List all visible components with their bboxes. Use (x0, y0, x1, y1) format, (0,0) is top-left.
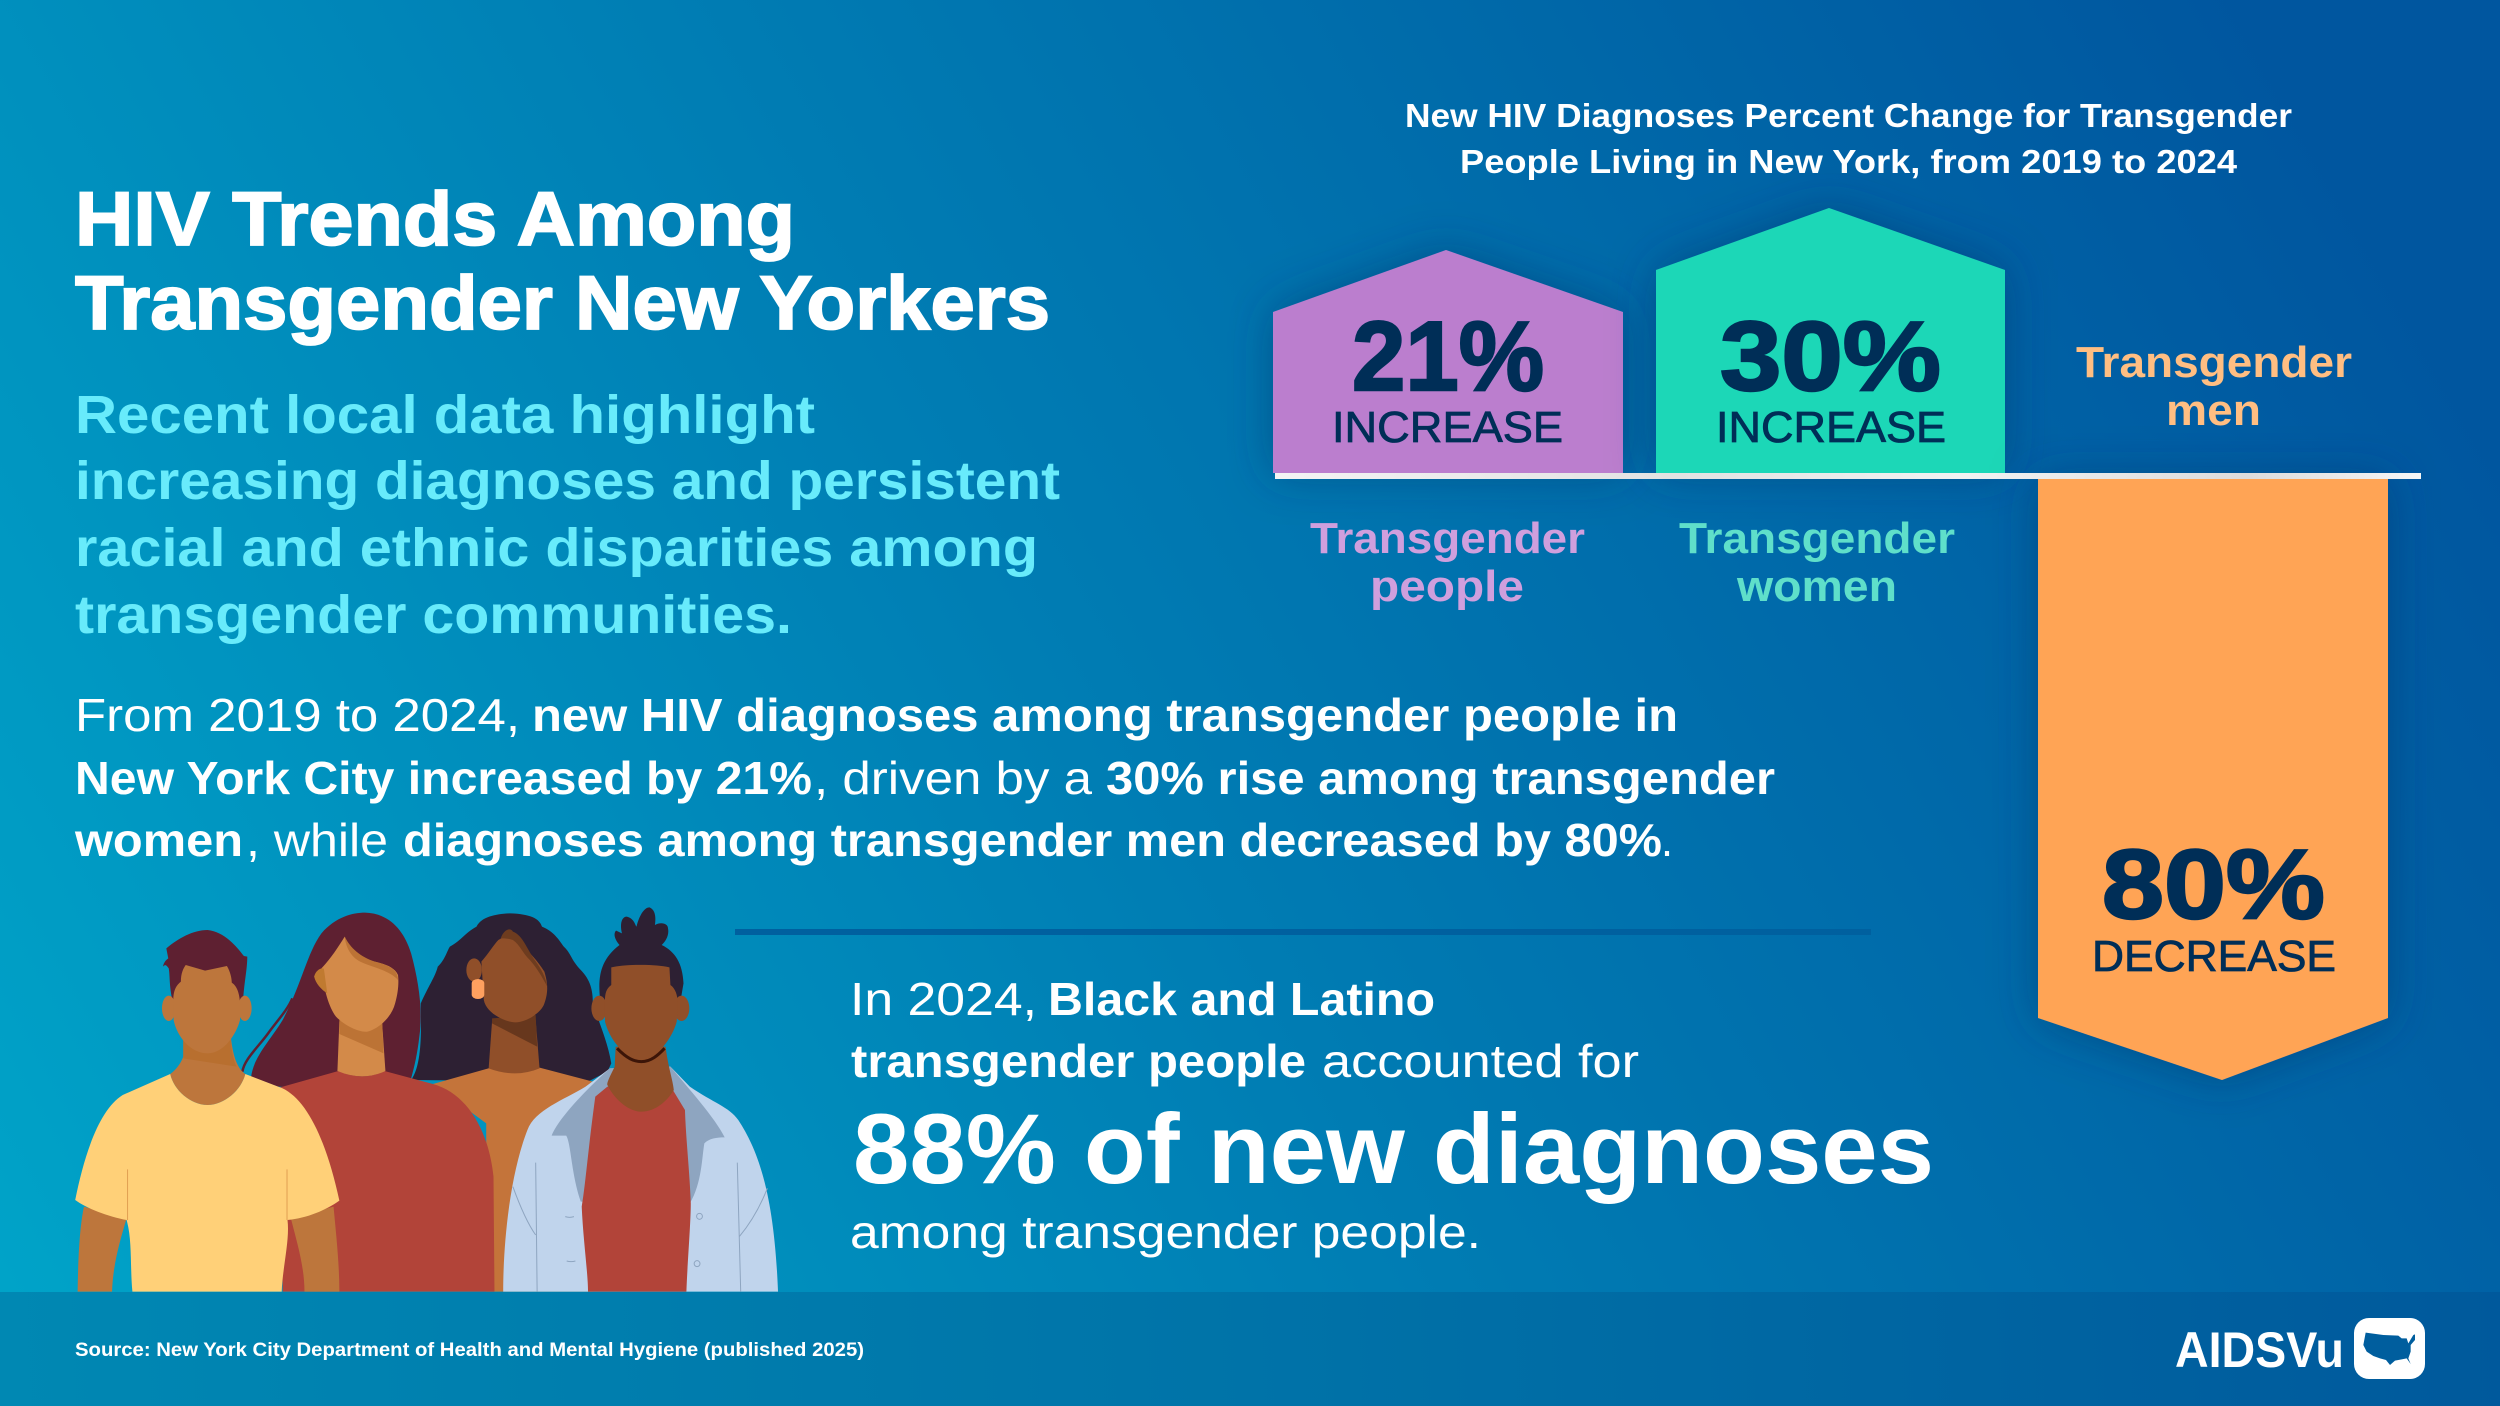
callout: 88 percent of new diagnoses: 88% of new diagnoses (853, 1093, 1934, 1204)
bar: transgender women 30 percent increase: 30% (1720, 301, 1941, 411)
divider line (735, 929, 1871, 935)
label: transgender men: men (2166, 386, 2261, 435)
subtitle: racial and ethnic disparities among (75, 518, 1038, 578)
bar: transgender men 80 percent decrease: DECREASE (2092, 932, 2336, 981)
chart axis line (1275, 473, 2421, 479)
label: transgender women (1679, 514, 1955, 611)
title: HIV Trends Among (75, 177, 795, 262)
label: transgender people (1310, 514, 1585, 611)
label: transgender people: people (1370, 562, 1524, 611)
title (75, 177, 1050, 346)
chart: percent change (1273, 97, 2421, 1080)
person: woman with long hair (242, 913, 494, 1292)
body paragraph: new HIV diagnoses among transgender people in (532, 689, 1678, 741)
body paragraph: New York City increased by 21% (75, 752, 812, 804)
label: transgender people: Transgender (1310, 514, 1585, 563)
subtitle: transgender communities. (75, 585, 792, 645)
AIDSVu logo: AIDSVu (2175, 1322, 2344, 1378)
AIDSVu logo (2175, 1318, 2425, 1379)
subtitle: increasing diagnoses and persistent (75, 451, 1060, 511)
title: Transgender New Yorkers (75, 261, 1050, 346)
subtitle (75, 385, 1060, 645)
body paragraph: . (1661, 814, 1673, 866)
bar: transgender men 80 percent decrease (2038, 479, 2388, 1080)
chart title: People Living in New York, from 2019 to 2024 (1460, 143, 2238, 180)
illustration: four people (75, 907, 778, 1292)
callout: 88 percent of new diagnoses: accounted for (1322, 1035, 1639, 1087)
label: transgender women: Transgender (1679, 514, 1955, 563)
label: transgender women: women (1736, 562, 1897, 611)
body paragraph: 30% rise among transgender (1106, 752, 1775, 804)
person: back woman with curly hair (411, 913, 611, 1292)
callout: 88 percent of new diagnoses: Black and Latino (1048, 973, 1435, 1025)
body paragraph: diagnoses among transgender men decreased by 80% (403, 814, 1662, 866)
label: transgender men (2076, 338, 2352, 435)
body paragraph: , while (246, 814, 388, 866)
bar: transgender women 30 percent increase (1656, 208, 2005, 473)
chart title: New HIV Diagnoses Percent Change for Transgender (1405, 97, 2292, 134)
bar: transgender people 21 percent increase: INCREASE (1332, 403, 1563, 452)
body paragraph: , driven by a (814, 752, 1092, 804)
bar: transgender people 21 percent increase (1273, 250, 1623, 473)
body paragraph: From 2019 to 2024, (75, 689, 520, 741)
bar: transgender people 21 percent increase: 21% (1352, 301, 1544, 411)
source note: Source: New York City Department of Health and Mental Hygiene (published 2025) (75, 1340, 864, 1361)
label: transgender men: Transgender (2076, 338, 2352, 387)
person: man in yellow shirt (75, 930, 339, 1292)
person: man in denim jacket (503, 907, 778, 1292)
chart title (1405, 97, 2292, 180)
bar: transgender women 30 percent increase: INCREASE (1716, 403, 1946, 452)
callout: 88 percent of new diagnoses: transgender people (851, 1035, 1306, 1087)
callout: 88 percent of new diagnoses: In 2024, (850, 973, 1037, 1025)
footer band (0, 1292, 2500, 1406)
callout: 88 percent of new diagnoses: among transgender people. (850, 1206, 1481, 1258)
body paragraph: women (74, 814, 243, 866)
callout: 88 percent of new diagnoses (850, 973, 1934, 1258)
bar: transgender men 80 percent decrease: 80% (2102, 829, 2325, 939)
subtitle: Recent local data highlight (75, 385, 815, 445)
body paragraph (74, 689, 1775, 866)
icon: US map (2363, 1333, 2415, 1365)
